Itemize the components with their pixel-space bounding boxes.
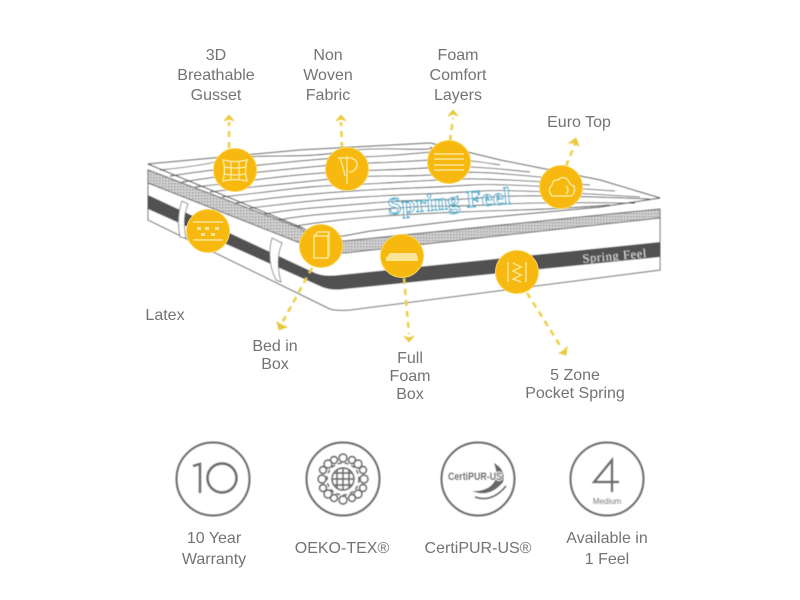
label: CertiPUR-US: CertiPUR-US® (425, 540, 532, 557)
label: foam comfort layers: Comfort (430, 67, 487, 84)
icon: bed in box (300, 224, 342, 268)
dark side band (148, 195, 660, 290)
badge: 10 year warranty (176, 442, 250, 516)
label: 5 zone pocket spring: Pocket Spring (525, 385, 625, 402)
globe (318, 454, 368, 504)
label: 3D breathable gusset: 3D (206, 47, 226, 64)
icon: latex (186, 210, 230, 252)
badge: 4 medium: Medium (593, 497, 622, 506)
arrow: 5 zone spring (527, 293, 567, 355)
mesh gusset (148, 170, 660, 253)
side handles (178, 201, 282, 282)
label: full foam box: Box (396, 386, 424, 403)
label: 3D breathable gusset: Gusset (191, 87, 242, 104)
badge: CertiPUR-US (442, 442, 514, 516)
icon: pocket spring (496, 250, 538, 294)
label: euro top: Euro Top (547, 114, 611, 131)
arrow: foam comfort (448, 110, 458, 141)
icon: 3D gusset (214, 148, 256, 192)
label: non woven fabric: Woven (303, 67, 353, 84)
label: bed in box: Bed in (252, 338, 298, 355)
badge: OEKO-TEX (306, 442, 380, 516)
label: 10 year warranty: 10 Year (187, 530, 242, 547)
icon: foam layers (428, 140, 470, 184)
label: OEKO-TEX: OEKO-TEX® (295, 540, 389, 557)
icon: full foam box (380, 234, 424, 278)
label: 5 zone pocket spring: 5 Zone (550, 367, 600, 384)
brand name on side band: Spring Feel (582, 246, 647, 266)
label: bed in box: Box (261, 356, 289, 373)
label: available in 1 feel: 1 Feel (585, 551, 629, 568)
quilting lines (160, 147, 650, 226)
label: available in 1 feel: Available in (566, 530, 648, 547)
label: latex: Latex (145, 307, 185, 324)
badge: CertiPUR-US: CertiPUR-US (448, 471, 502, 483)
badge: 4 medium (570, 442, 644, 516)
label: non woven fabric: Fabric (306, 87, 350, 104)
arrow: non woven (336, 115, 346, 148)
icon: needle and thread (326, 148, 368, 190)
mattress illustration (148, 143, 660, 310)
icon: cloud (540, 166, 582, 208)
arrow: 3D gusset (224, 115, 234, 148)
quilted top surface (148, 143, 660, 236)
mattress side body (148, 183, 660, 310)
label: foam comfort layers: Layers (434, 87, 482, 104)
arrow: bed in box (277, 268, 312, 330)
dashed arrows (224, 110, 579, 355)
label: 10 year warranty: Warranty (182, 551, 246, 568)
label: full foam box: Foam (390, 368, 430, 385)
arrow: euro top (566, 138, 579, 166)
label: full foam box: Full (397, 350, 423, 367)
label: foam comfort layers: Foam (438, 47, 478, 64)
arrow: full foam box (404, 278, 414, 342)
label: 3D breathable gusset: Breathable (177, 67, 255, 84)
brand name on top surface: Spring Feel (387, 184, 512, 220)
label: non woven fabric: Non (313, 47, 343, 64)
